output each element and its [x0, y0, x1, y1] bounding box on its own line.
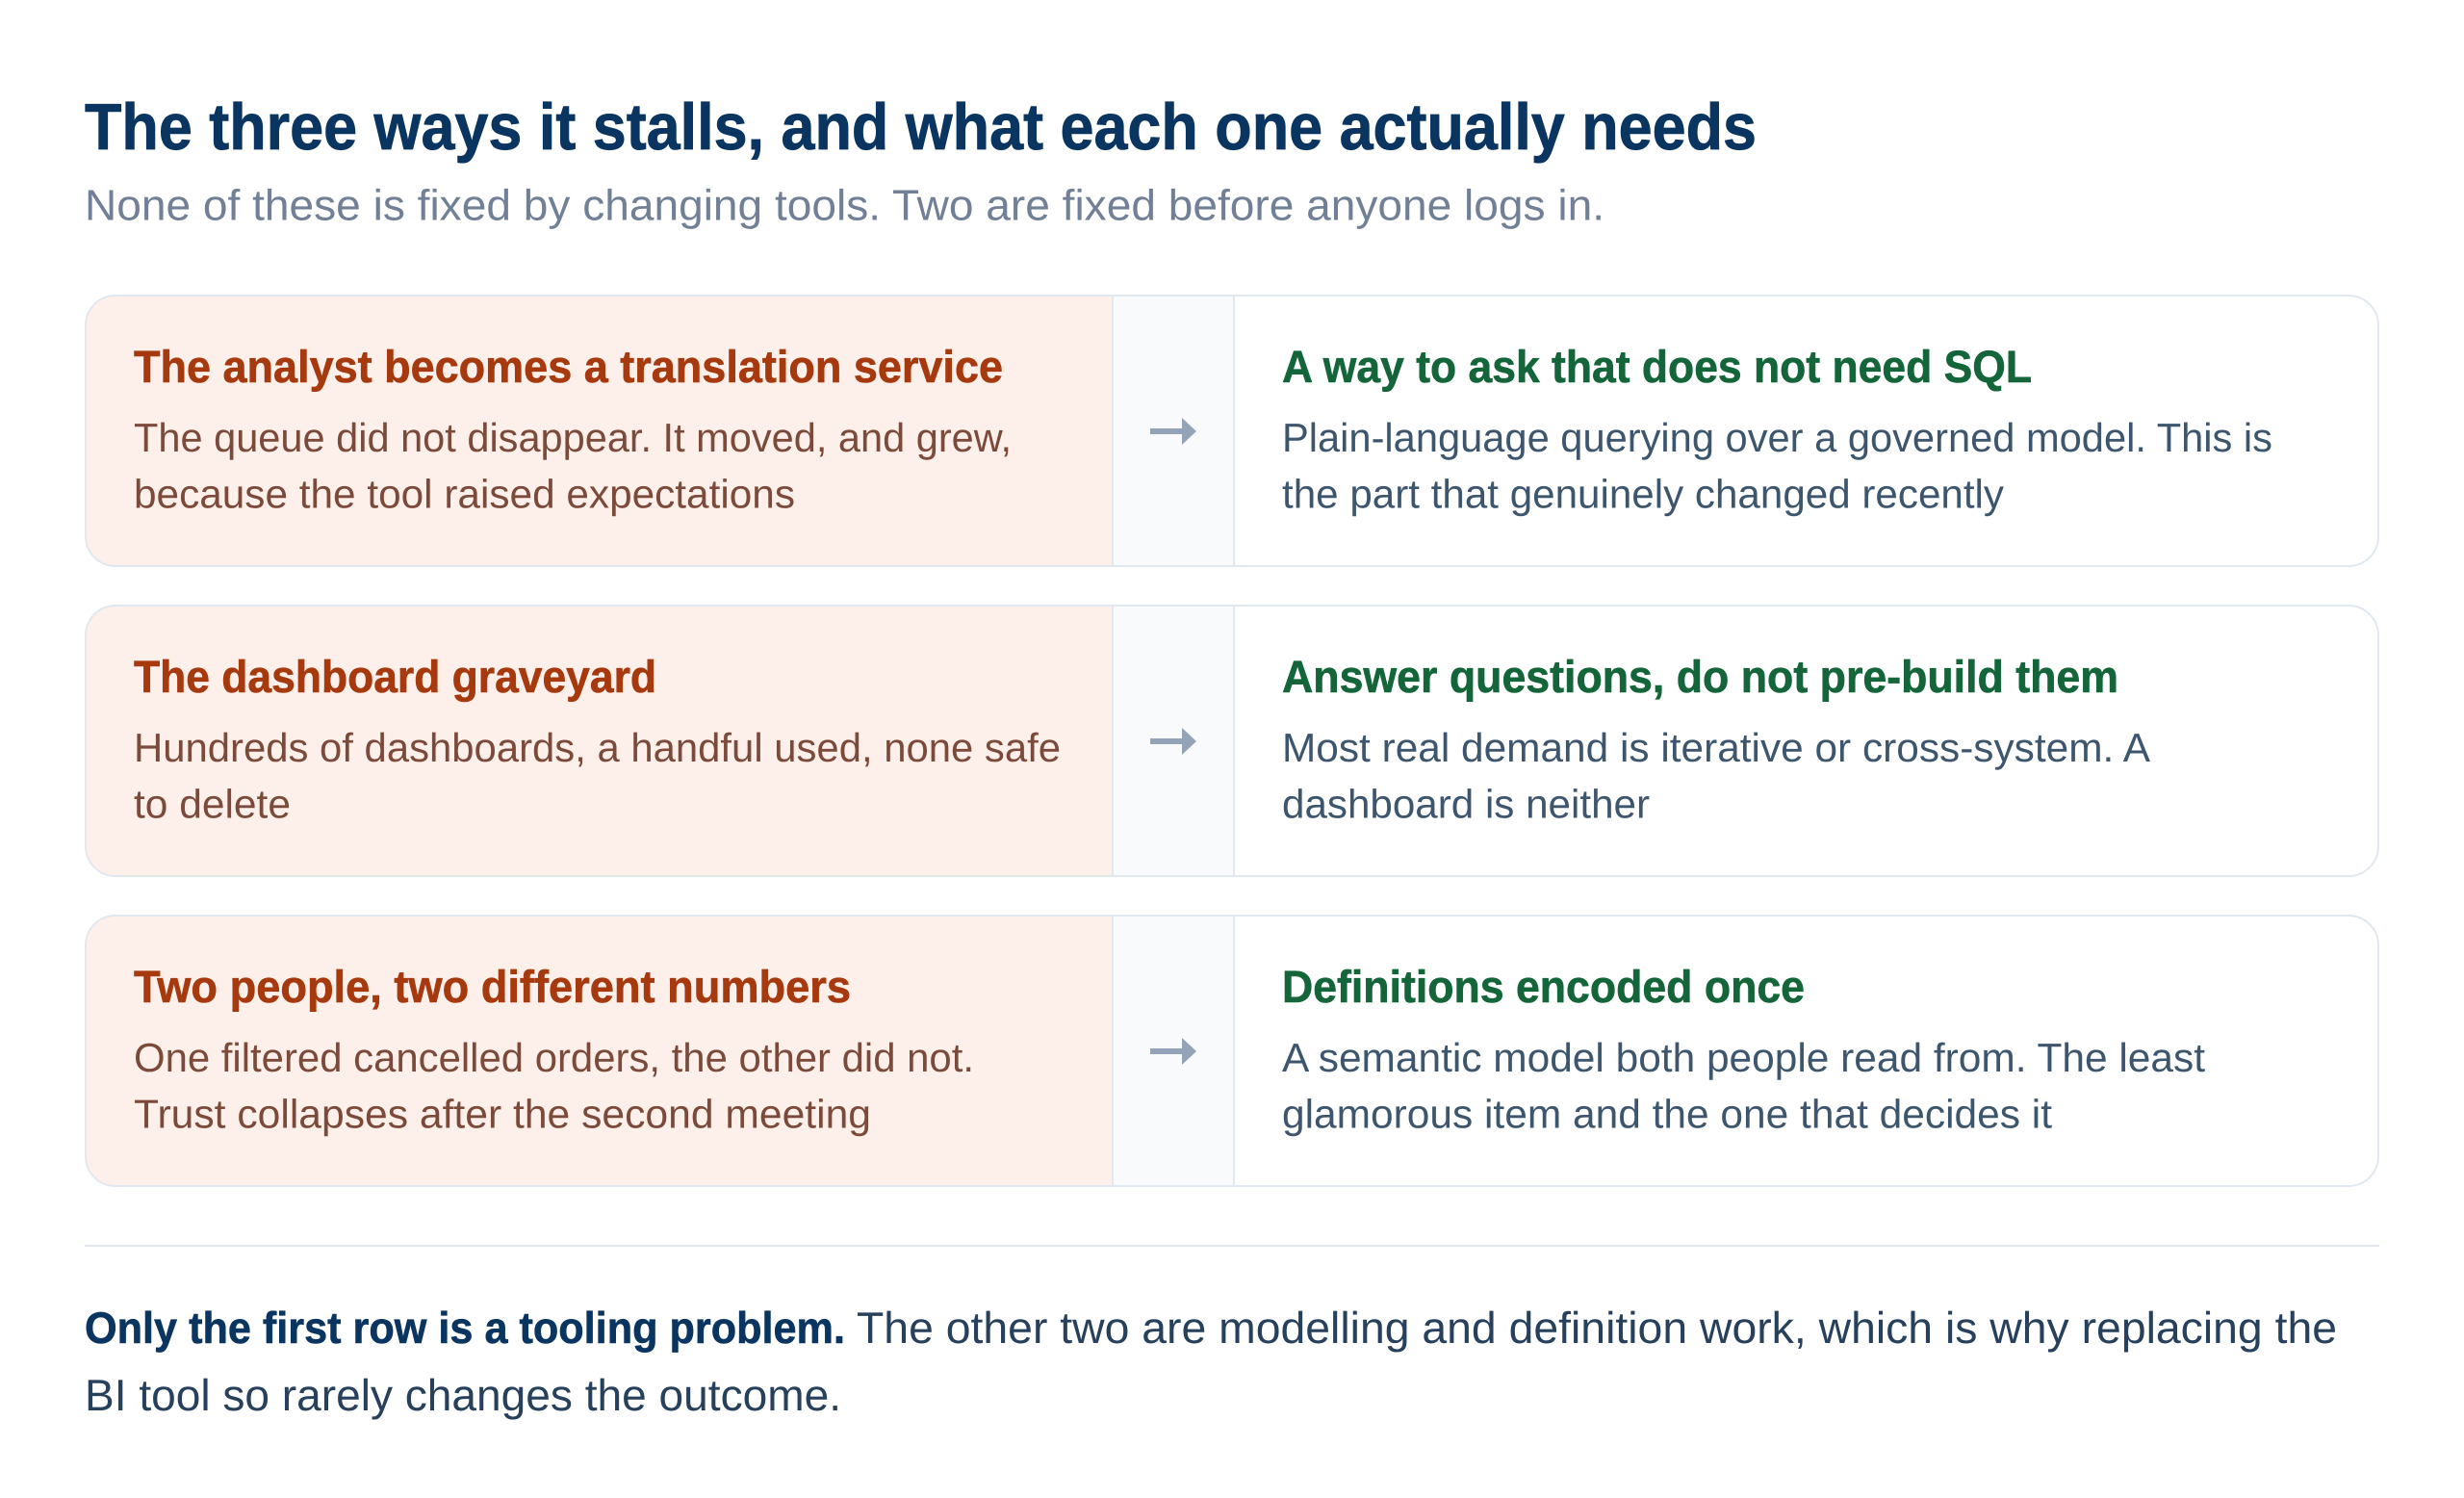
need: ask without SQL: the part that genuinely changed recently [1282, 472, 2004, 516]
problem: two numbers heading and description: Trust collapses after the second meeting [134, 1092, 871, 1136]
need: answer questions: Most real demand is iterative or cross-system. A [1282, 725, 2150, 770]
problem: dashboard graveyard heading and description: Hundreds of dashboards, a handful used, none safe [134, 725, 1061, 770]
need: definitions encoded once: glamorous item and the one that decides it [1282, 1092, 2052, 1136]
problem: analyst heading and description: The analyst becomes a translation service [134, 341, 1003, 392]
footer takeaway: Only the first row is a tooling problem. [85, 1303, 845, 1353]
need: definitions encoded once [1282, 961, 2205, 1136]
problem: two numbers heading and description [134, 961, 974, 1136]
footer takeaway [85, 1303, 2337, 1420]
problem: two numbers heading and description: One filtered cancelled orders, the other did not. [134, 1035, 974, 1080]
footer takeaway: BI tool so rarely changes the outcome. [85, 1370, 841, 1420]
problem: dashboard graveyard heading and description [134, 651, 1061, 826]
row 2: dashboard graveyard [85, 605, 2378, 877]
need: answer questions: Answer questions, do not pre-build them [1282, 651, 2118, 702]
problem: dashboard graveyard heading and description: to delete [134, 782, 291, 826]
need: definitions encoded once: A semantic model both people read from. The least [1282, 1035, 2205, 1080]
problem: analyst heading and description [134, 341, 1012, 516]
subtitle: None of these is fixed by changing tools. Two are fixed before anyone logs in. [85, 181, 1604, 229]
need: ask without SQL: A way to ask that does not need SQL [1282, 341, 2032, 392]
arrow [1150, 1038, 1196, 1065]
problem: two numbers heading and description: Two people, two different numbers [134, 961, 851, 1012]
problem: analyst heading and description: because the tool raised expectations [134, 472, 795, 516]
arrow [1150, 418, 1196, 445]
need: answer questions: dashboard is neither [1282, 782, 1650, 826]
problem: dashboard graveyard heading and description: The dashboard graveyard [134, 651, 656, 702]
row 1: translation service [85, 295, 2378, 567]
title: The three ways it stalls, and what each one actually needs [85, 90, 1757, 164]
problem: analyst heading and description: The queue did not disappear. It moved, and grew, [134, 415, 1012, 460]
need: ask without SQL: Plain-language querying over a governed model. This is [1282, 415, 2272, 460]
need: definitions encoded once: Definitions encoded once [1282, 961, 1805, 1012]
need: answer questions [1282, 651, 2150, 826]
row 3: two different numbers [85, 915, 2378, 1187]
footer takeaway: The other two are modelling and definition work, which is why replacing the [857, 1303, 2337, 1353]
need: ask without SQL [1282, 341, 2272, 516]
arrow [1150, 728, 1196, 755]
